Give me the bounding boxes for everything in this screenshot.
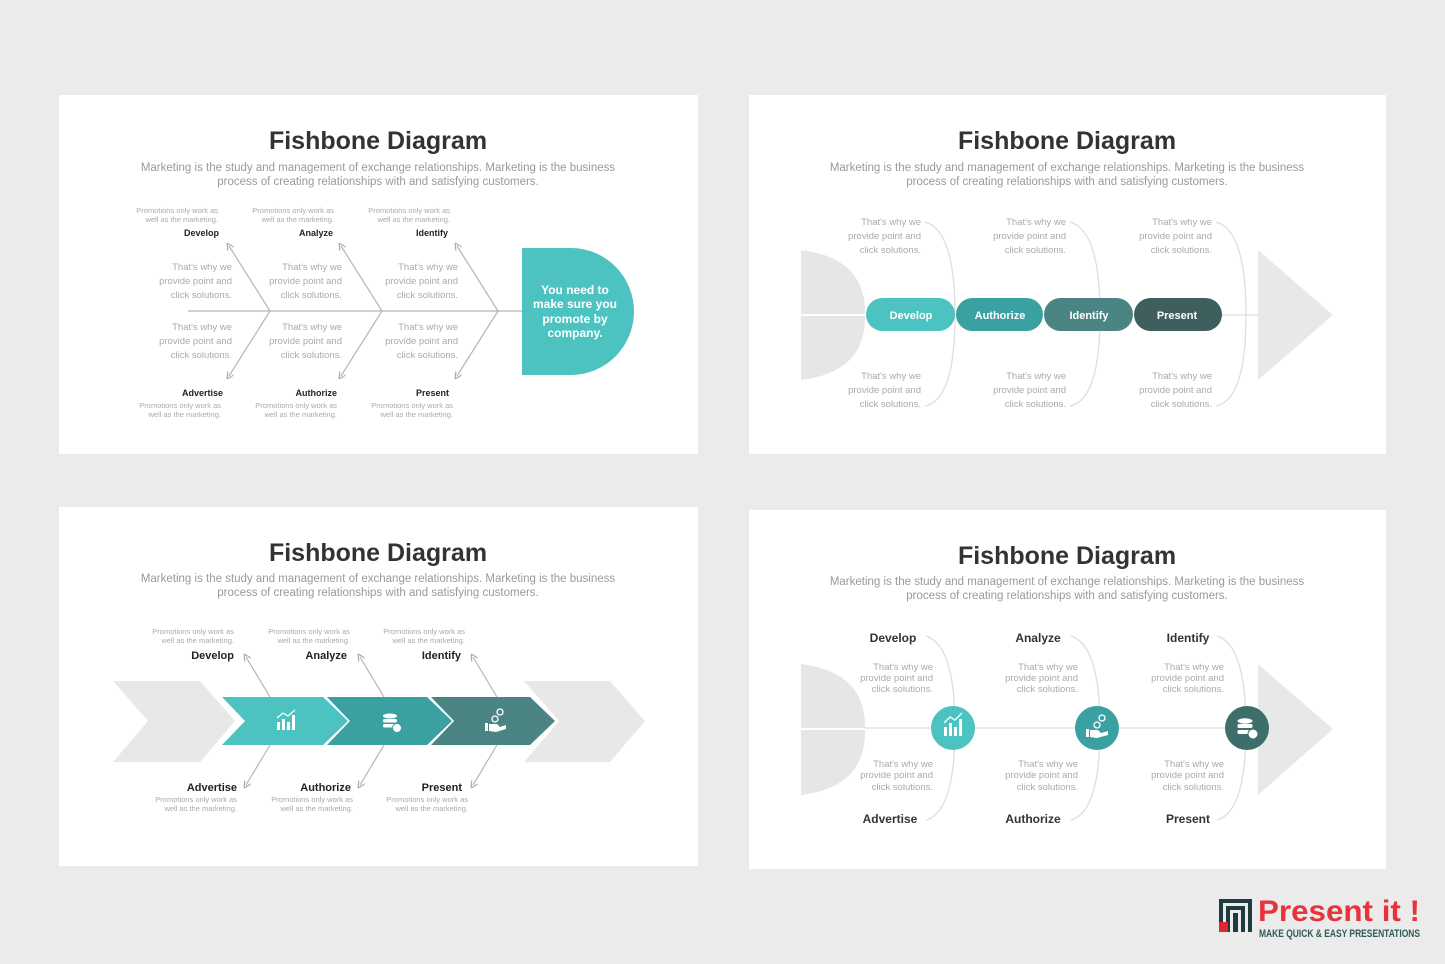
pills 2: Develop (890, 310, 933, 322)
labels 1: provide point and (159, 336, 232, 347)
labels 1: Advertise (182, 388, 223, 398)
labels 1: click solutions. (281, 290, 342, 301)
labels 4: That's why we (1018, 759, 1078, 770)
labels 1: Analyze (299, 228, 333, 238)
labels 3: Advertise (187, 782, 237, 794)
labels 1: provide point and (269, 336, 342, 347)
labels 1: well as the marketing. (263, 410, 337, 419)
labels 3: Authorize (300, 782, 351, 794)
labels 3: Promotions only work as (383, 627, 465, 636)
subtitle 3 (141, 573, 615, 599)
labels 1: well as the marketing. (260, 215, 334, 224)
labels 1: Promotions only work as (368, 206, 450, 215)
labels 4: That's why we (1164, 759, 1224, 770)
panel: fishbone 4 (749, 510, 1386, 869)
labels 3: Promotions only work as (386, 795, 468, 804)
labels 3: Promotions only work as (152, 627, 234, 636)
labels 1: well as the marketing. (144, 215, 218, 224)
texts 2: click solutions. (860, 399, 921, 410)
subtitle 1 (141, 162, 615, 188)
labels 4: Develop (870, 631, 916, 645)
texts 2: click solutions. (860, 245, 921, 256)
labels 1: click solutions. (171, 290, 232, 301)
labels 1: That's why we (282, 322, 342, 333)
labels 3: Develop (191, 650, 234, 662)
labels 1: Promotions only work as (255, 401, 337, 410)
labels 4: click solutions. (1163, 782, 1224, 793)
title 1: Fishbone Diagram (269, 127, 487, 155)
labels 4: That's why we (873, 662, 933, 673)
pills 2: Identify (1069, 310, 1109, 322)
subtitle 2: Marketing is the study and management of exchange relationships. Marketing is the business (830, 162, 1304, 174)
texts 2: provide point and (848, 231, 921, 242)
labels 1: Present (416, 388, 449, 398)
fish tail 2 (801, 250, 865, 380)
texts 2: provide point and (848, 385, 921, 396)
subtitle 4: Marketing is the study and management of exchange relationships. Marketing is the business (830, 576, 1304, 588)
subtitle 1: process of creating relationships with and satisfying customers. (217, 176, 539, 188)
labels 4: Present (1166, 812, 1210, 826)
logo (1219, 895, 1420, 940)
texts 2: provide point and (993, 385, 1066, 396)
labels 4: That's why we (1018, 662, 1078, 673)
panel: fishbone 2 (749, 95, 1386, 454)
labels 1: That's why we (398, 322, 458, 333)
labels 1: well as the marketing. (379, 410, 453, 419)
texts 2: That's why we (1152, 371, 1212, 382)
labels 1: Promotions only work as (371, 401, 453, 410)
labels 4: Identify (1167, 631, 1210, 645)
pills 2: Authorize (975, 310, 1025, 322)
labels 3: well as the marketing. (160, 636, 234, 645)
labels 1: well as the marketing. (376, 215, 450, 224)
labels 4: That's why we (1164, 662, 1224, 673)
logo: Present it ! (1258, 895, 1420, 928)
subtitle 3: Marketing is the study and management of exchange relationships. Marketing is the business (141, 573, 615, 585)
gray chevrons 3 (113, 681, 645, 762)
fish head triangle 2 (1258, 250, 1333, 380)
labels 1: well as the marketing. (147, 410, 221, 419)
fish head callout: company. (547, 326, 603, 340)
title 4: Fishbone Diagram (958, 542, 1176, 570)
labels 3: well as the marketing. (276, 636, 350, 645)
labels 4: provide point and (860, 673, 933, 684)
labels 1: Identify (416, 228, 448, 238)
texts 2: That's why we (1006, 217, 1066, 228)
labels 4: Advertise (863, 812, 918, 826)
texts 2: click solutions. (1151, 245, 1212, 256)
fish head callout (522, 248, 634, 375)
labels 4: provide point and (1151, 673, 1224, 684)
labels 1: Promotions only work as (252, 206, 334, 215)
labels 3: Promotions only work as (155, 795, 237, 804)
fish head callout: make sure you (533, 297, 617, 311)
labels 3: well as the marketing. (391, 636, 465, 645)
labels 3: Promotions only work as (268, 627, 350, 636)
subtitle 2 (830, 162, 1304, 188)
labels 4: click solutions. (1163, 684, 1224, 695)
labels 3: Present (422, 782, 462, 794)
labels 1: That's why we (172, 322, 232, 333)
texts 2: provide point and (993, 231, 1066, 242)
subtitle 2: process of creating relationships with and satisfying customers. (906, 176, 1228, 188)
pills 2 (866, 298, 1222, 331)
icon: chart (277, 710, 295, 730)
fish head callout: promote by (542, 312, 608, 326)
subtitle 4: process of creating relationships with and satisfying customers. (906, 590, 1228, 602)
labels 3: Identify (422, 650, 462, 662)
texts 2: That's why we (861, 217, 921, 228)
title 2: Fishbone Diagram (958, 127, 1176, 155)
labels 4: click solutions. (872, 684, 933, 695)
labels 1: click solutions. (397, 350, 458, 361)
labels 4 (860, 631, 1224, 826)
labels 1: Promotions only work as (136, 206, 218, 215)
labels 3 (152, 627, 468, 813)
labels 4: Analyze (1015, 631, 1061, 645)
labels 3: Promotions only work as (271, 795, 353, 804)
labels 1 (136, 206, 458, 419)
labels 1: That's why we (172, 262, 232, 273)
labels 1: Promotions only work as (139, 401, 221, 410)
labels 1: provide point and (159, 276, 232, 287)
labels 3: well as the marketing. (279, 804, 353, 813)
icon: hand coins (485, 709, 506, 732)
panel: fishbone 1 (59, 95, 698, 454)
labels 1: That's why we (398, 262, 458, 273)
texts 2: That's why we (1152, 217, 1212, 228)
circles with icons 4 (931, 706, 1269, 750)
subtitle 1: Marketing is the study and management of exchange relationships. Marketing is the business (141, 162, 615, 174)
fish tail 4 (801, 664, 865, 795)
subtitle 3: process of creating relationships with and satisfying customers. (217, 587, 539, 599)
labels 4: click solutions. (1017, 782, 1078, 793)
labels 1: click solutions. (281, 350, 342, 361)
labels 4: provide point and (860, 770, 933, 781)
labels 1: click solutions. (171, 350, 232, 361)
title 3: Fishbone Diagram (269, 539, 487, 567)
teal chevrons 3 (222, 697, 555, 745)
connectors 3 (246, 657, 497, 785)
curves 2 (925, 222, 1246, 406)
labels 3: Analyze (305, 650, 347, 662)
texts 2: click solutions. (1151, 399, 1212, 410)
texts 2: provide point and (1139, 385, 1212, 396)
labels 1: provide point and (385, 336, 458, 347)
labels 4: Authorize (1005, 812, 1061, 826)
fish head 4 (1258, 664, 1333, 795)
subtitle 4 (830, 576, 1304, 602)
texts 2: provide point and (1139, 231, 1212, 242)
labels 4: That's why we (873, 759, 933, 770)
labels 1: Develop (184, 228, 219, 238)
texts 2: click solutions. (1005, 245, 1066, 256)
labels 4: provide point and (1005, 673, 1078, 684)
curves 4 (926, 636, 1246, 820)
icon: database clock (383, 714, 402, 732)
labels 4: click solutions. (872, 782, 933, 793)
labels 4: provide point and (1005, 770, 1078, 781)
labels 4: click solutions. (1017, 684, 1078, 695)
spine and bones 1 (188, 246, 522, 376)
texts 2: click solutions. (1005, 399, 1066, 410)
labels 1: provide point and (269, 276, 342, 287)
panel: fishbone 3 (59, 507, 698, 866)
fish head callout: You need to (541, 283, 609, 297)
texts 2: That's why we (861, 371, 921, 382)
labels 4: provide point and (1151, 770, 1224, 781)
labels 3: well as the marketing. (163, 804, 237, 813)
pills 2: Present (1157, 310, 1198, 322)
labels 3: well as the marketing. (394, 804, 468, 813)
labels 1: Authorize (296, 388, 337, 398)
labels 1: That's why we (282, 262, 342, 273)
labels 1: click solutions. (397, 290, 458, 301)
labels 1: provide point and (385, 276, 458, 287)
texts 2 (848, 217, 1212, 410)
texts 2: That's why we (1006, 371, 1066, 382)
